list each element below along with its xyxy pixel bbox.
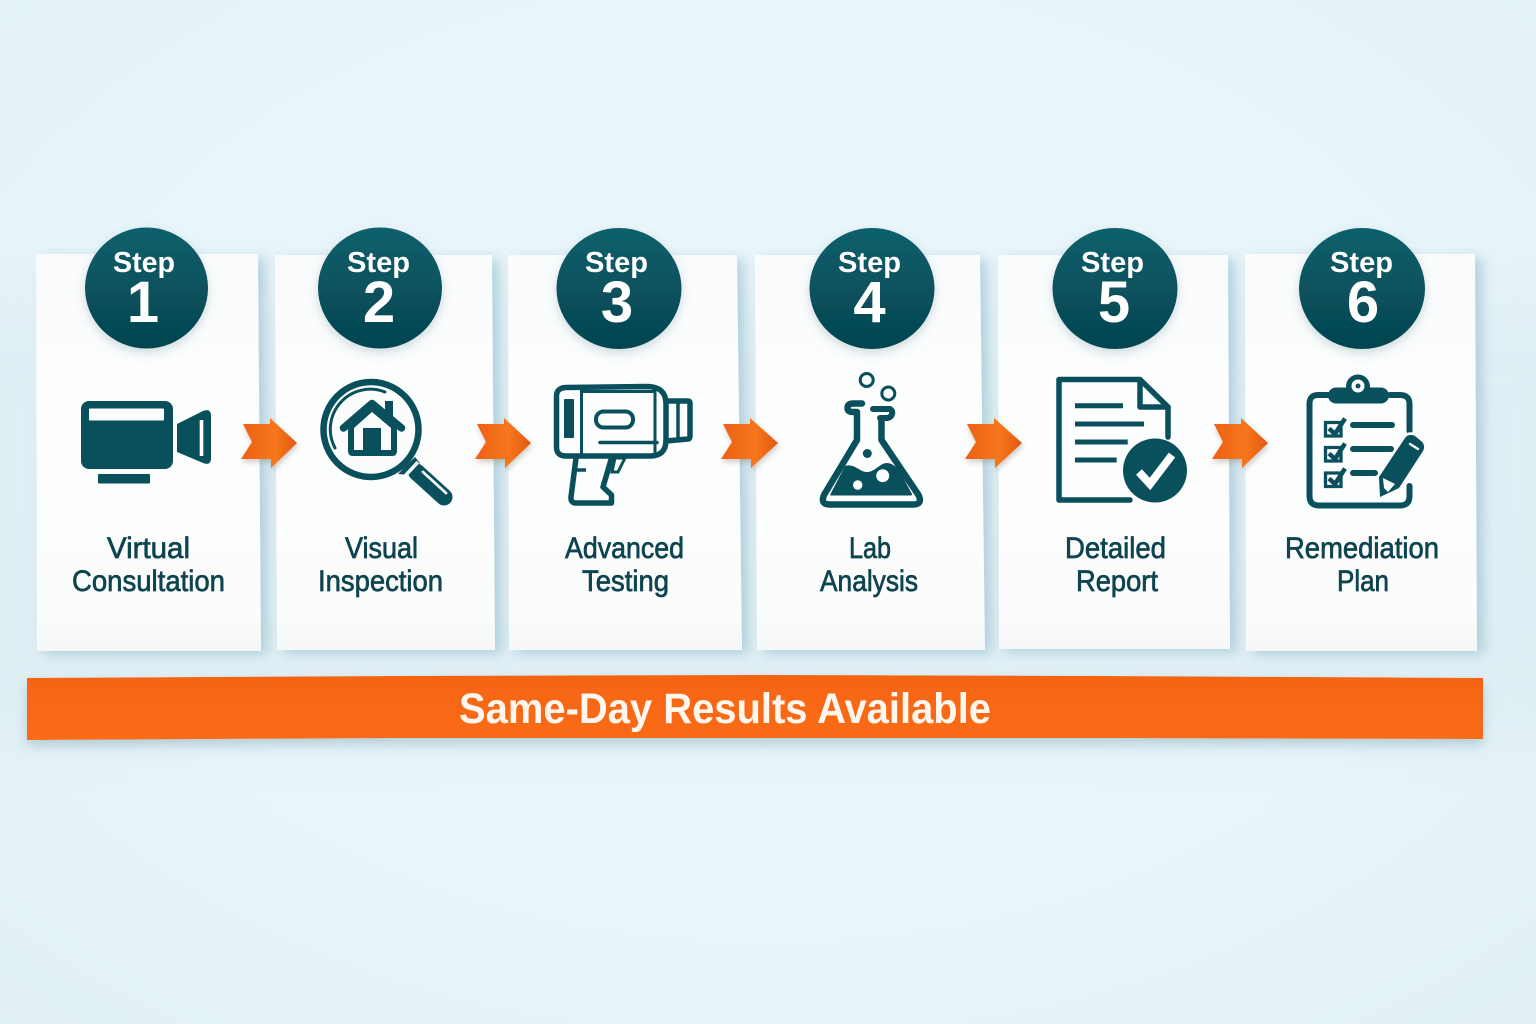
- label: Advanced Testing: [565, 532, 684, 598]
- icon: report with check: [1059, 380, 1187, 502]
- card 6: [1245, 254, 1477, 651]
- icon: clipboard checklist with pencil: [1310, 374, 1424, 506]
- label: Lab Analysis: Analysis: [820, 565, 918, 598]
- step 1 badge: [85, 228, 208, 348]
- step 5 badge: Step: [1081, 247, 1144, 279]
- panel: step 1: [36, 228, 261, 651]
- panel: step 4: [755, 228, 985, 650]
- label: Detailed Report: [1065, 532, 1166, 598]
- label: Remediation Plan: Plan: [1337, 565, 1389, 598]
- step 4 badge: [810, 228, 934, 349]
- arrow 2: [475, 418, 531, 468]
- step 6 badge: Step: [1330, 247, 1393, 279]
- arrow 3: [721, 418, 778, 468]
- label: Visual Inspection: [318, 532, 443, 598]
- step 3 badge: Step: [585, 247, 648, 279]
- label: Virtual Consultation: Consultation: [72, 565, 225, 598]
- panel: step 6: [1245, 228, 1477, 651]
- label: Visual Inspection: Inspection: [318, 565, 443, 598]
- card 2: [275, 255, 495, 650]
- icon: handheld testing device: [556, 386, 690, 503]
- step 2 badge: 2: [363, 270, 395, 335]
- card 4: [755, 255, 985, 650]
- label: Visual Inspection: Visual: [345, 532, 418, 565]
- banner: [27, 675, 1483, 740]
- card 3: [508, 255, 742, 650]
- step 5 badge: [1052, 228, 1178, 349]
- card 5: [998, 255, 1230, 649]
- label: Virtual Consultation: Virtual: [107, 532, 190, 565]
- arrow 5: [1212, 418, 1268, 468]
- step 6 badge: 6: [1347, 270, 1379, 335]
- step 4 badge: 4: [853, 270, 886, 335]
- banner text: Same-Day Results Available: [459, 685, 991, 733]
- step 4 badge: Step: [838, 247, 901, 279]
- panel: step 3: [508, 228, 742, 650]
- card 1: [36, 254, 261, 651]
- icon: lab flask: [823, 374, 920, 504]
- panel: step 5: [998, 228, 1230, 649]
- label: Advanced Testing: Testing: [582, 565, 669, 598]
- label: Detailed Report: Detailed: [1065, 532, 1166, 565]
- arrow 4: [965, 418, 1022, 468]
- label: Lab Analysis: Lab: [849, 532, 891, 565]
- step 2 badge: Step: [347, 247, 410, 279]
- label: Remediation Plan: [1285, 532, 1439, 598]
- label: Lab Analysis: [820, 532, 918, 598]
- arrow 1: [241, 418, 297, 468]
- icon: magnifier over house: [324, 382, 446, 497]
- label: Remediation Plan: Remediation: [1285, 532, 1439, 565]
- label: Detailed Report: Report: [1076, 565, 1159, 598]
- step 6 badge: [1299, 228, 1425, 349]
- step 1 badge: Step: [113, 247, 175, 279]
- step 1 badge: 1: [127, 270, 159, 335]
- step 3 badge: 3: [601, 270, 633, 335]
- panel: step 2: [275, 228, 495, 650]
- label: Virtual Consultation: [72, 532, 225, 598]
- step 2 badge: [318, 228, 442, 348]
- step 3 badge: [556, 228, 682, 349]
- icon: video camera: [81, 401, 211, 484]
- step 5 badge: 5: [1098, 270, 1130, 335]
- label: Advanced Testing: Advanced: [565, 532, 684, 565]
